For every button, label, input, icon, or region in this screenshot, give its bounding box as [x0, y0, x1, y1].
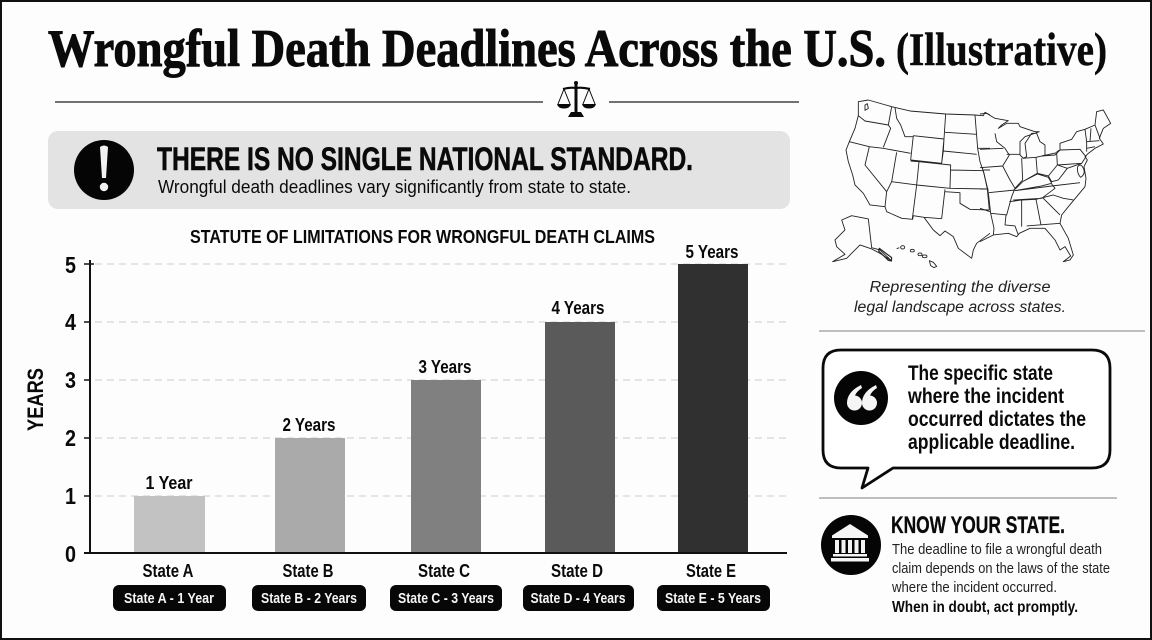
- know your state heading: KNOW YOUR STATE.: [891, 512, 1065, 539]
- category labels: State C: [418, 561, 470, 581]
- y axis ticks and labels: [65, 252, 94, 567]
- state pills: State C - 3 Years: [398, 590, 494, 607]
- category labels: State D: [551, 561, 603, 581]
- icon: scales of justice: [557, 81, 596, 117]
- know your state body: When in doubt, act promptly.: [892, 599, 1078, 616]
- western states: [833, 100, 990, 268]
- bar value labels: 3 Years: [418, 356, 472, 377]
- y axis ticks and labels: 4: [65, 309, 76, 335]
- map: United States outline: [833, 100, 1111, 268]
- y axis ticks and labels: 5: [65, 252, 76, 278]
- Alaska: [833, 216, 892, 262]
- bars: [134, 264, 748, 553]
- y axis ticks and labels: 2: [65, 425, 76, 451]
- gridlines: [95, 264, 787, 496]
- category labels: [142, 561, 736, 581]
- know your state body: The deadline to file a wrongful death: [892, 541, 1102, 558]
- know your state body: claim depends on the laws of the state: [892, 560, 1110, 577]
- quote text: where the incident: [907, 385, 1064, 408]
- know your state body: where the incident occurred.: [891, 579, 1057, 596]
- Hawaii: [897, 246, 937, 268]
- chart title: STATUTE OF LIMITATIONS FOR WRONGFUL DEATH CLAIMS: [190, 226, 655, 247]
- category labels: State A: [142, 561, 194, 581]
- quote text: The specific state: [908, 362, 1053, 385]
- axes: [84, 260, 787, 553]
- category labels: State B: [282, 561, 334, 581]
- state pills: State A - 1 Year: [124, 590, 214, 607]
- state pills: State D - 4 Years: [530, 590, 626, 607]
- y axis ticks and labels: 3: [65, 367, 76, 393]
- panel: quote speech bubble: [823, 350, 1110, 488]
- bar value labels: 4 Years: [552, 297, 604, 318]
- state pills: State E - 5 Years: [665, 590, 761, 607]
- quote text: occurred dictates the: [908, 408, 1086, 431]
- know your state body: [891, 541, 1110, 616]
- header divider with scales icon: [55, 81, 799, 117]
- map caption: Representing the diverse: [870, 279, 1051, 296]
- state pills: [113, 585, 770, 611]
- category labels: State E: [686, 561, 736, 581]
- bar value labels: [146, 241, 738, 493]
- bar value labels: 1 Year: [146, 472, 192, 493]
- y axis ticks and labels: 0: [65, 541, 76, 567]
- title: (Illustrative): [896, 24, 1107, 76]
- panel: national standard banner: [48, 131, 790, 209]
- y axis title: YEARS: [23, 368, 48, 431]
- icon: courthouse: [821, 515, 881, 575]
- title: Wrongful Death Deadlines Across the U.S.: [48, 20, 886, 78]
- panel: bar chart: [23, 226, 787, 611]
- icon: quotation mark: [834, 371, 888, 425]
- map caption: [854, 279, 1066, 316]
- bar value labels: 5 Years: [686, 241, 738, 262]
- y axis ticks and labels: 1: [65, 483, 76, 509]
- map caption: legal landscape across states.: [854, 299, 1066, 316]
- banner subtext: Wrongful death deadlines vary significantly from state to state.: [158, 177, 631, 197]
- quote text: [907, 362, 1086, 454]
- icon: exclamation mark: [74, 140, 134, 200]
- quote text: applicable deadline.: [908, 431, 1075, 454]
- state pills: State B - 2 Years: [261, 590, 357, 607]
- eastern states: [980, 110, 1111, 262]
- panel: know your state: [821, 512, 1110, 616]
- bar value labels: 2 Years: [282, 414, 336, 435]
- banner heading: THERE IS NO SINGLE NATIONAL STANDARD.: [157, 141, 693, 177]
